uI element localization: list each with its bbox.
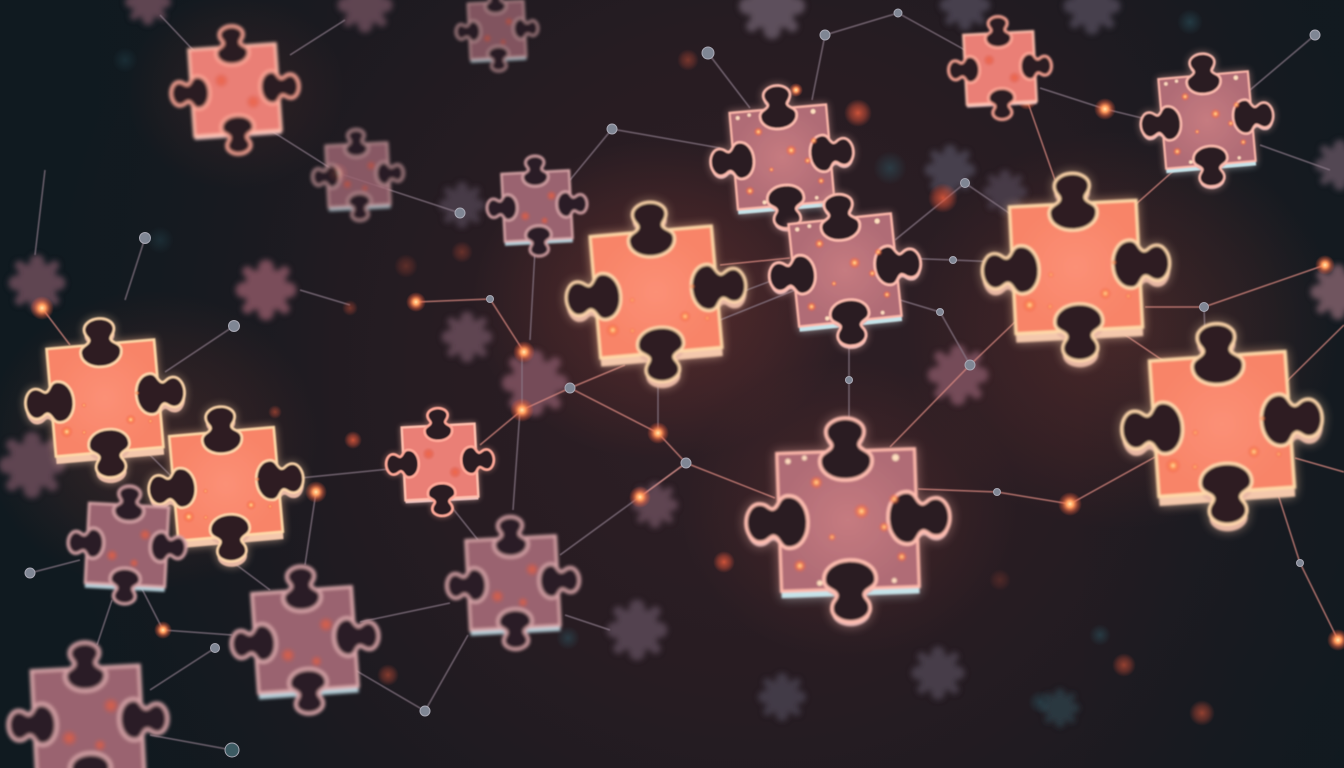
puzzle piece: mauve top centre [704, 79, 860, 238]
puzzle piece: faded bottom left corner [4, 638, 172, 768]
connection nodes: glowing orange [30, 83, 1344, 651]
puzzle piece: bright lower left [142, 400, 311, 573]
puzzle piece: faded bottom middle left [226, 561, 384, 719]
puzzle piece: faded lower left [65, 483, 189, 607]
puzzle piece: bright right upper [977, 168, 1175, 372]
puzzle piece: dim upper left [310, 127, 406, 223]
puzzle piece: bright centre [558, 194, 754, 396]
puzzle piece: bright left [18, 311, 192, 490]
background bokeh lights [112, 9, 1215, 726]
puzzle piece: small centre left [484, 153, 590, 259]
puzzle piece: small salmon mid left [383, 405, 497, 519]
puzzle piece: dim top centre [453, 0, 541, 74]
puzzle piece: mauve lower centre [742, 414, 954, 630]
puzzle piece: mauve top right [1135, 48, 1279, 195]
puzzle piece: mauve centre [761, 186, 929, 357]
puzzle piece: faded bottom centre [443, 513, 583, 653]
puzzle piece: bright right lower [1115, 317, 1330, 538]
puzzle piece: salmon top right [946, 14, 1054, 122]
puzzle piece: salmon top left [166, 21, 304, 159]
